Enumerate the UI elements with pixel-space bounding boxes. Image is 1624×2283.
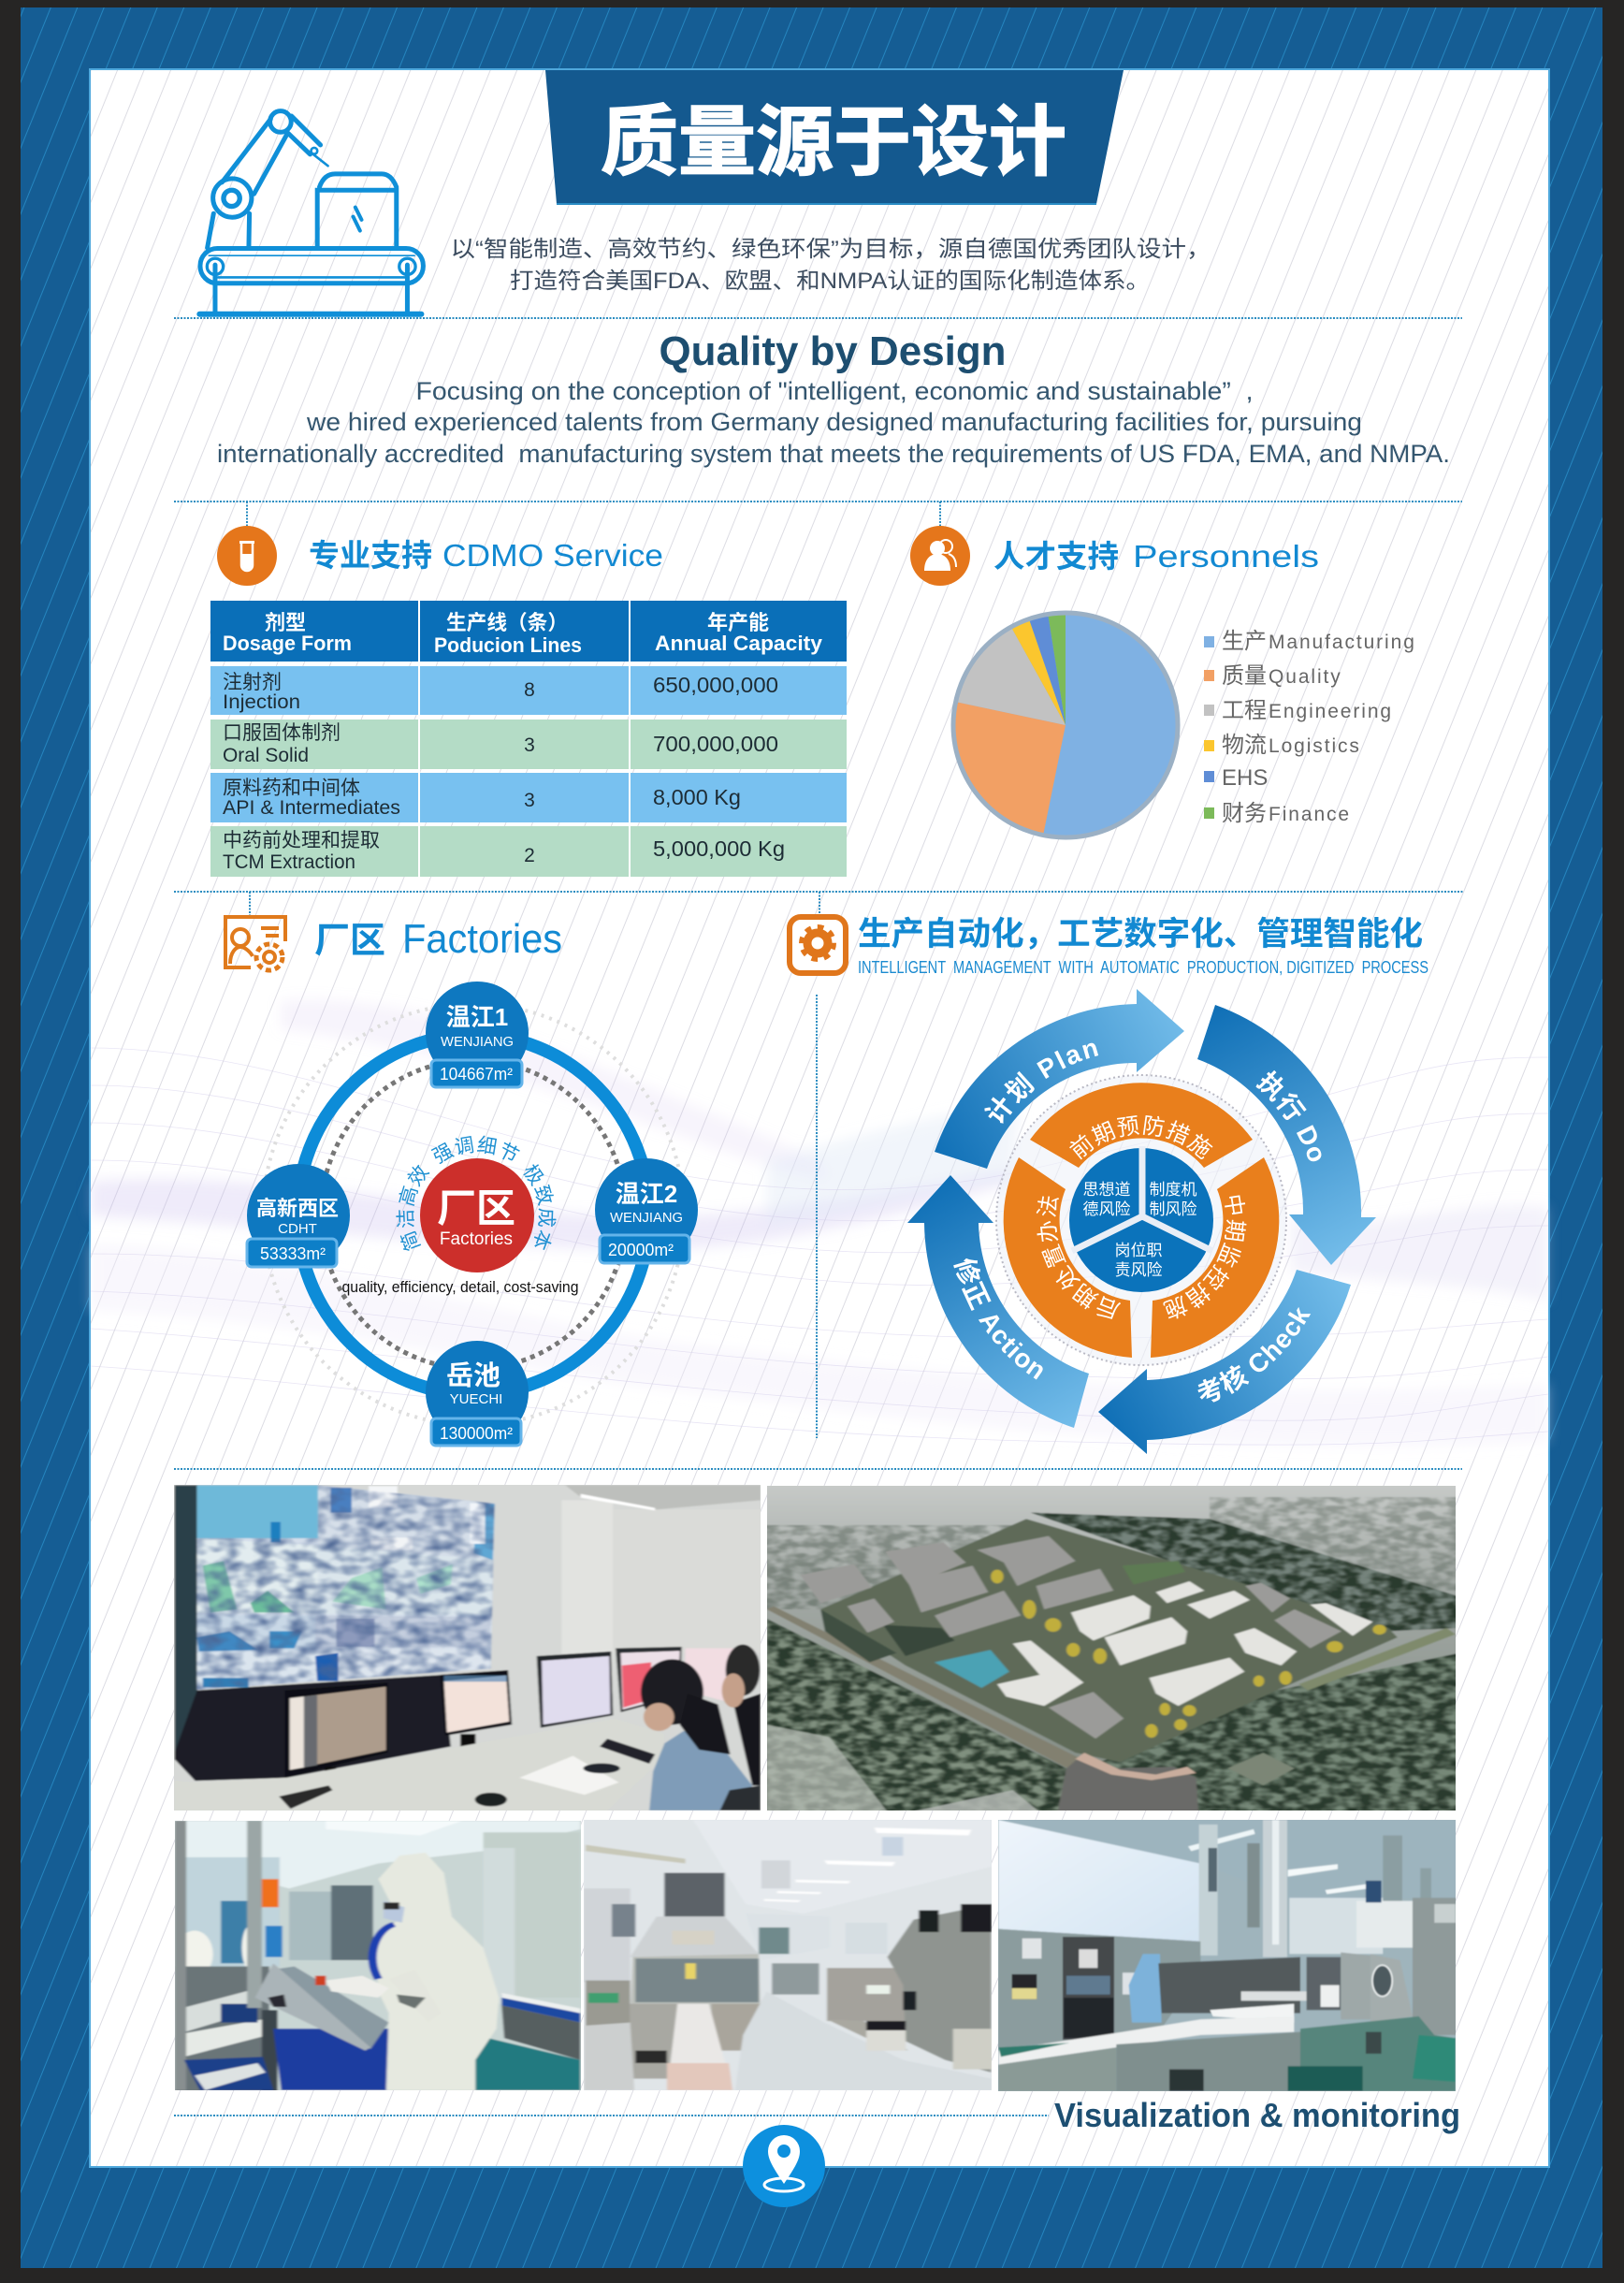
English paragraph: we hired experienced talents from Germany designed manufacturing facilities for, pursuing [306,408,1362,436]
photo: monitoring control room [168,1478,779,1822]
node: Wenjiang 1 [426,982,529,1087]
table: dosage forms [210,601,847,877]
blue core: risks: 德风险 [1083,1200,1130,1218]
node: Wenjiang 1: 104667m² [440,1065,513,1083]
heading: CDMO service: CDMO Service [442,538,663,573]
blue core: risks: 思想道 [1083,1181,1130,1199]
table: dosage forms: 5,000,000 Kg [653,836,785,861]
icon: people [910,526,970,586]
table: dosage forms: 注射剂 [223,672,282,693]
table: dosage forms: TCM Extraction [223,851,355,873]
principles in English: quality, efficiency, detail, cost-saving [342,1278,578,1296]
photo: cleanroom operator [168,1810,588,2098]
arrow: Check: 考核 Check [1197,1307,1312,1403]
heading: personnels: 人才支持 [993,539,1119,574]
curved principles text: 强调细节 [430,1136,520,1164]
table: dosage forms: 700,000,000 [653,732,778,756]
subheading: automation: INTELLIGENT MANAGEMENT WITH AUTOMATIC PRODUCTION, DIGITIZED PROCESS [858,958,1428,977]
arrow: Action: 修正 Action [953,1258,1043,1379]
panel: CDMO service [210,526,847,877]
photo: packaging line [583,1817,997,2098]
table: dosage forms: 剂型 [265,611,306,634]
table: dosage forms: 口服固体制剂 [223,722,341,744]
node: CDHT: 53333m² [260,1244,326,1263]
heading: personnels [993,539,1319,574]
legend: personnel: 生产Manufacturing [1222,629,1416,654]
table: dosage forms: 8 [524,679,535,701]
icon: robot arm on conveyor [199,111,423,314]
node: CDHT: CDHT [278,1221,317,1237]
title banner [545,70,1124,204]
photo: filling machine [994,1817,1462,2098]
title text: 质量源于设计 [601,100,1066,185]
photo: aerial view of plant [762,1478,1478,1822]
section dividers [174,318,1463,2116]
icon: test tube [217,526,277,586]
English paragraph: internationally accredited manufacturing system that meets the requirements of US FDA, EMA, and NMPA. [217,440,1450,468]
node: Wenjiang 1: WENJIANG [441,1034,514,1050]
table: dosage forms: 2 [524,845,535,866]
table: dosage forms: API & Intermediates [223,797,400,819]
heading: factories: 厂区 [314,922,385,961]
heading: factories: Factories [402,916,562,962]
legend: personnel [1204,629,1416,826]
icon: location pin [743,2125,825,2207]
panel: automation cycle [787,914,1428,1454]
heading: automation: 生产自动化，工艺数字化、管理智能化 [858,916,1423,952]
node: Yuechi [426,1341,529,1446]
table: dosage forms: Injection [223,691,300,713]
legend: personnel: 物流Logistics [1222,733,1361,758]
table: dosage forms: Oral Solid [223,745,309,766]
blue core: risks: 制度机 [1149,1181,1197,1199]
node: centre Factories: Factories [440,1229,513,1249]
orange ring: measures [1003,1083,1280,1358]
blue core: risks: 责风险 [1115,1261,1162,1279]
arrow: Do [1197,1005,1376,1265]
curved principles text: 极致成本 [523,1164,556,1250]
background wave mesh [91,1000,1548,1446]
node: Yuechi: YUECHI [450,1391,502,1407]
node: Wenjiang 2: WENJIANG [610,1210,683,1226]
blue core: risks: 制风险 [1149,1200,1197,1218]
table: dosage forms: 3 [524,790,535,811]
legend: personnel: EHS [1222,765,1268,791]
English heading: Quality by Design [659,328,1007,374]
node: Wenjiang 2 [595,1158,698,1263]
Chinese intro text: 打造符合美国FDA、欧盟、和NMPA认证的国际化制造体系。 [510,269,1150,294]
English paragraph: Focusing on the conception of "intelligent, economic and sustainable” , [415,377,1254,405]
table: dosage forms: 650,000,000 [653,673,778,697]
caption: visualization: Visualization & monitoring [1054,2096,1460,2134]
legend: personnel: 财务Finance [1222,801,1351,826]
table: dosage forms: 3 [524,734,535,756]
table: dosage forms: Annual Capacity [655,632,823,655]
table: dosage forms: 8,000 Kg [653,785,741,809]
node: Wenjiang 2: 20000m² [608,1241,674,1259]
arrow: Plan: 计划 Plan [984,1042,1098,1124]
arrow: Check [1098,1270,1351,1454]
arrow: Plan [935,989,1184,1169]
node: centre Factories: 厂区 [437,1186,515,1230]
heading: CDMO service [309,538,663,573]
node: Yuechi: 岳池 [446,1360,500,1391]
node: Wenjiang 2: 温江2 [616,1180,677,1208]
diagram: factory ring [245,982,698,1447]
orange ring: measures: 后期处置办法 [1037,1196,1121,1319]
table: dosage forms: Poducion Lines [434,633,582,657]
curved principles text [396,1136,556,1251]
table: dosage forms: 原料药和中间体 [223,778,360,799]
node: Yuechi: 130000m² [440,1424,513,1443]
node: CDHT: 高新西区 [256,1197,339,1220]
node: CDHT [247,1164,350,1267]
orange ring: measures: 中期监控措施 [1163,1195,1246,1319]
Chinese intro text: 以“智能制造、高效节约、绿色环保”为目标，源自德国优秀团队设计， [451,237,1211,262]
table: dosage forms: 中药前处理和提取 [223,830,380,851]
node: Wenjiang 1: 温江1 [446,1003,508,1031]
legend: personnel: 工程Engineering [1222,698,1393,723]
arrow: Action [907,1175,1089,1428]
Chinese intro text [451,237,1211,294]
arrow: Do: 执行 Do [1255,1070,1321,1162]
table: dosage forms: 生产线（条） [446,611,568,634]
diagram: PDCA cycle [907,989,1376,1454]
English paragraph [217,377,1450,468]
heading: personnels: Personnels [1133,539,1319,574]
panel: personnels [910,526,1416,837]
curved principles text: 简洁高效 [396,1164,430,1251]
orange ring: measures: 前期预防措施 [1069,1115,1212,1160]
heading: CDMO service: 专业支持 [309,538,432,573]
legend: personnel: 质量Quality [1222,663,1342,689]
icon: gear [790,917,846,973]
heading: factories [314,916,562,962]
panel: factories [224,915,698,1447]
icon: factories [225,917,285,970]
blue core: risks [1069,1146,1213,1292]
pie chart: staff breakdown [953,613,1178,837]
table: dosage forms: 年产能 [707,611,769,634]
blue core: risks: 岗位职 [1115,1242,1162,1259]
node: centre Factories [420,1158,534,1272]
table: dosage forms: Dosage Form [223,632,352,655]
